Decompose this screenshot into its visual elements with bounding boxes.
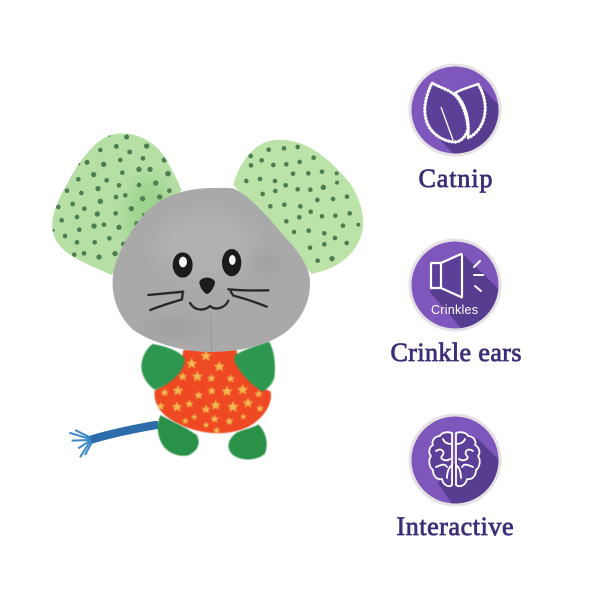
green feet xyxy=(158,415,267,459)
strawberry body xyxy=(154,350,271,434)
face xyxy=(148,249,268,310)
badge: catnip xyxy=(408,64,502,156)
speaker icon xyxy=(431,254,462,297)
whiskers and mouth xyxy=(148,289,268,310)
brain icon xyxy=(429,432,480,486)
toy mouse plush xyxy=(50,130,367,459)
leaf right xyxy=(455,84,485,138)
label: crinkle ears: Crinkle ears xyxy=(390,338,522,367)
eye right xyxy=(222,249,241,276)
sound ticks xyxy=(474,261,483,291)
leaf left xyxy=(425,83,468,142)
badge: brain xyxy=(408,414,502,506)
right ear xyxy=(230,137,367,277)
left ear xyxy=(50,130,183,277)
tail xyxy=(69,425,158,457)
green arms xyxy=(141,342,275,391)
label: catnip: Catnip xyxy=(418,164,492,193)
label: interactive: Interactive xyxy=(396,512,514,541)
eye left xyxy=(173,252,193,278)
badge: crinkles xyxy=(408,238,502,332)
grey head xyxy=(112,188,310,352)
badge text: Crinkles xyxy=(431,303,478,317)
nose xyxy=(199,278,215,294)
